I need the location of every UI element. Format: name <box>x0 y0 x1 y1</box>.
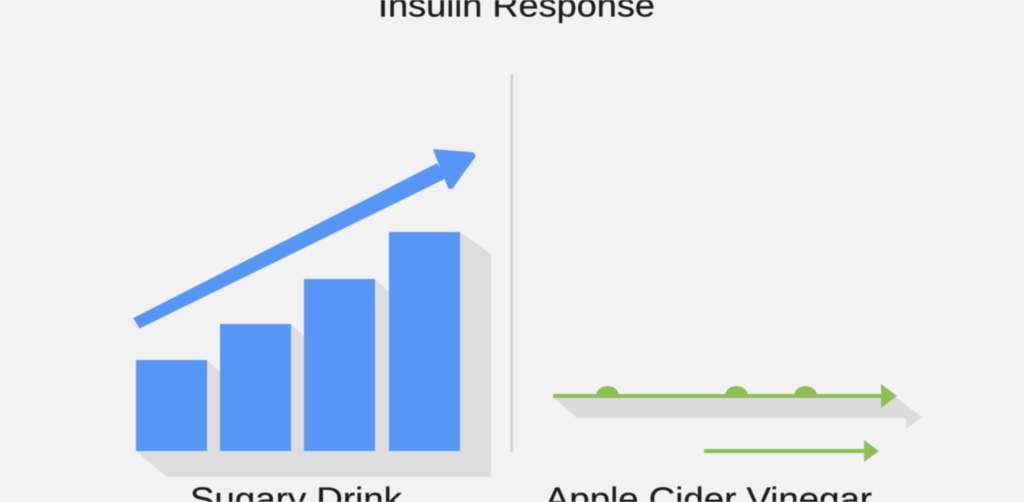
bump 3 <box>794 386 817 396</box>
arrow shadow <box>553 397 922 429</box>
icon: lower flat arrow <box>704 440 879 462</box>
bar 3 <box>304 279 375 451</box>
panel divider <box>510 74 513 452</box>
panel: apple cider vinegar flat response <box>545 384 922 502</box>
bump 1 <box>596 386 619 396</box>
bump 2 <box>725 386 748 396</box>
icon: main flat arrow <box>553 384 897 408</box>
bar shadows <box>136 232 491 477</box>
icon: rising arrow <box>134 150 475 328</box>
panel: sugary drink bar chart <box>134 150 491 502</box>
bar 4 <box>389 232 460 451</box>
bar 2 <box>220 324 291 451</box>
bar 1 <box>136 360 207 451</box>
